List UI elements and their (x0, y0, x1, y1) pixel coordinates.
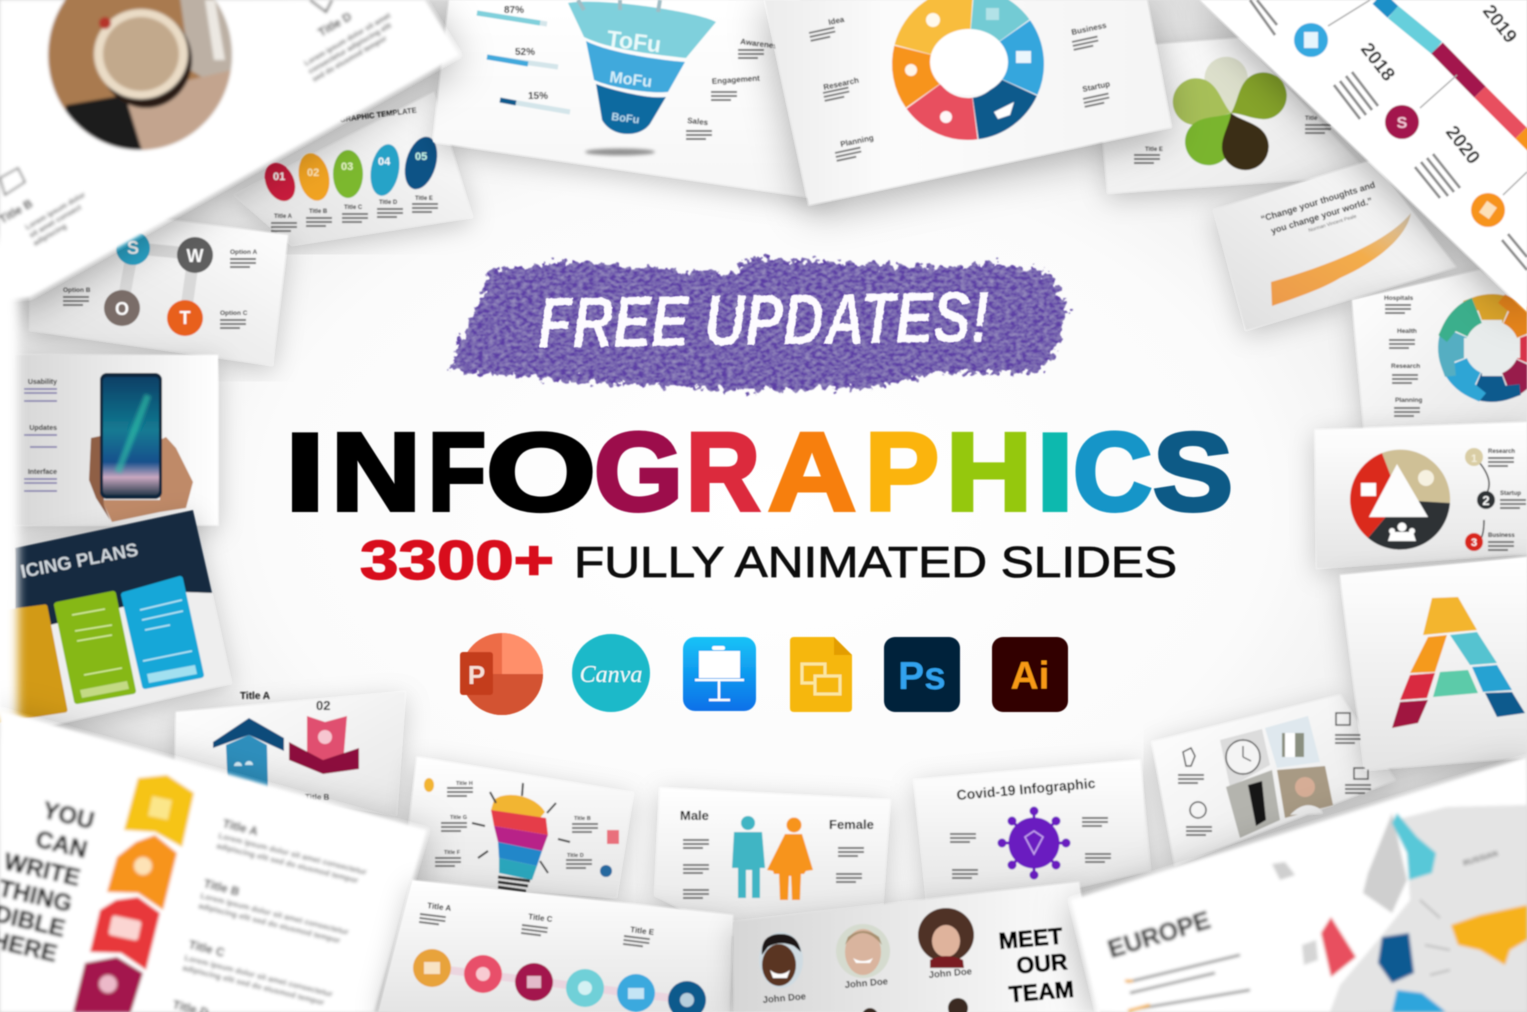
slide count: 3300+ (360, 529, 554, 591)
card: Title B: Lorem ipsum dolor (24, 190, 87, 232)
timeline nodes: S (1397, 115, 1408, 132)
female label: Female (829, 817, 874, 832)
slide: SWOT (30, 215, 288, 365)
Europe text lines (1128, 955, 1250, 1010)
SWOT labels: Option A (230, 249, 258, 256)
slide labels: Title A (240, 691, 270, 702)
brush stroke (1271, 213, 1411, 306)
icon: Illustrator (992, 637, 1068, 712)
slide labels: Title B (305, 793, 330, 802)
icon: Photoshop (884, 637, 960, 712)
title: A (768, 411, 856, 534)
timeline labels (427, 901, 655, 937)
slide: clover (1103, 38, 1370, 193)
team names: John Doe (762, 991, 806, 1006)
percentage bars: 87% (504, 5, 524, 16)
clover labels (1145, 116, 1318, 153)
left white edge (0, 240, 18, 720)
title: I (1036, 411, 1074, 534)
step titles: Title E (415, 196, 433, 202)
slide: timeline (1200, 0, 1527, 312)
percentage bars: 52% (515, 47, 535, 58)
pricing card: pro (124, 579, 201, 686)
hospital labels: Health (1397, 328, 1417, 335)
list: Title A: adipiscing elit sed do eiusmod tempor (216, 841, 359, 885)
free updates text: FREE UPDATES! (537, 278, 990, 364)
SWOT labels: Option C (220, 310, 248, 317)
funnel labels: Engagement (712, 74, 760, 86)
wheel labels: Research (823, 76, 860, 92)
title: C (1073, 411, 1152, 534)
coffee photo circle (46, 0, 234, 152)
teardrop steps: 01 (273, 171, 285, 183)
funnel: MoFu (609, 69, 653, 91)
slide labels (240, 691, 330, 802)
timeline years: 2020 (1441, 122, 1484, 168)
slide: covid infographic (914, 760, 1150, 905)
list: Title B: adipiscing elit sed do eiusmod tempor (198, 901, 341, 945)
slide: pricing plans (0, 510, 231, 728)
SWOT circles (104, 231, 213, 336)
funnel: BoFu (611, 111, 640, 126)
team headline (998, 922, 1075, 1008)
bulb labels: Title D (567, 853, 584, 859)
slide labels: 02 (316, 698, 330, 713)
wheel labels: Business (1071, 21, 1108, 37)
photo tile: person portrait (1277, 766, 1333, 818)
teardrop steps: 02 (307, 167, 319, 179)
funnel shadow (585, 148, 655, 156)
timeline years (1356, 1, 1521, 168)
team headline: MEET (998, 923, 1064, 954)
six segment wheel (891, 0, 1045, 141)
timeline labels: Title E (630, 925, 655, 937)
icon: PowerPoint: P (468, 660, 485, 690)
hand holding phone (89, 373, 193, 522)
slide: funnel (433, 0, 830, 200)
photo slide icons (1183, 713, 1368, 818)
slide: letter A (1340, 557, 1527, 770)
polygon letter A (1392, 597, 1525, 728)
title: I (285, 411, 325, 534)
step titles: Title D (379, 200, 398, 206)
feature list (28, 379, 57, 476)
percentage bars: 15% (528, 91, 548, 102)
wheel labels: Idea (828, 15, 846, 27)
slide: arrows (175, 691, 405, 815)
team names: John Doe (844, 976, 888, 991)
slide headline (0, 797, 97, 968)
hospital labels (1384, 295, 1422, 404)
list: Title C (182, 937, 334, 1007)
quote text: “Change your thoughts and (1260, 180, 1376, 224)
slide: triangle cycle (1315, 422, 1527, 568)
step titles: Title B (309, 209, 328, 215)
card: Title D: sed do eiusmod tempor (310, 34, 388, 84)
SWOT circles: O (115, 299, 129, 319)
SWOT circles: S (127, 238, 139, 258)
photo tile: book (1265, 716, 1320, 768)
title: N (331, 411, 421, 534)
percentage bars (477, 5, 570, 112)
icon: Keynote (683, 637, 756, 711)
feature list: Usability (28, 379, 57, 386)
step titles (274, 196, 433, 220)
list: Title C: Lorem ipsum dolor sit amet consectetur (184, 953, 334, 999)
list: Title C: Title C (187, 937, 226, 960)
card: Title B: sit amet consect (28, 202, 83, 240)
app icons (460, 633, 1068, 715)
pricing heading: ICING PLANS (19, 539, 140, 582)
teardrop steps: 04 (378, 156, 391, 168)
hospital wheel (1439, 295, 1527, 401)
numbered steps: 2 (1482, 493, 1490, 508)
list: Title B (198, 876, 350, 945)
icon: Photoshop: Ps (898, 655, 946, 698)
list: Title A (216, 816, 368, 885)
slide: photo grid (1152, 695, 1395, 865)
slide: Europe map (1071, 757, 1527, 1012)
teardrop steps: 05 (415, 151, 427, 163)
slide: quote (1214, 160, 1456, 330)
title: G (594, 411, 683, 534)
title: F (428, 411, 486, 534)
list: Title C: adipiscing elit sed do eiusmod tempor (182, 963, 325, 1007)
icon: Canva (572, 634, 650, 712)
SWOT labels: Option B (63, 287, 91, 294)
quote text: you change your world.” (1270, 195, 1373, 236)
step labels (1488, 449, 1521, 539)
step labels: Business (1488, 533, 1515, 539)
down arrow (289, 716, 359, 774)
title (285, 411, 1233, 534)
wheel labels: Startup (1082, 79, 1111, 94)
purple brush stroke (451, 258, 1066, 390)
funnel labels: Awareness (740, 37, 783, 51)
slide: phone in hand (15, 355, 218, 525)
slide headline: YOU (40, 797, 97, 835)
timeline text lines (1250, 0, 1527, 270)
card: Title D: Title D (316, 9, 354, 40)
slide: circle timeline (378, 880, 733, 1012)
card: Title D: consectetur adipiscing elit (306, 20, 393, 76)
subtitle text: FULLY ANIMATED SLIDES (574, 538, 1177, 587)
icon: Illustrator: Ai (1010, 655, 1050, 698)
slide: wheel (765, 0, 1171, 205)
bulb labels: Title F (444, 850, 461, 856)
list: Title B: Lorem ipsum dolor sit amet consectetur (200, 891, 350, 937)
title: P (865, 411, 939, 534)
numbered steps: 3 (1471, 537, 1477, 549)
covid heading: Covid-19 Infographic (956, 775, 1096, 803)
hospital labels: Research (1391, 363, 1420, 370)
slide: numbered list (0, 710, 427, 1012)
title: R (686, 411, 760, 534)
photo tile: clock (1220, 729, 1270, 787)
virus icon (999, 808, 1069, 878)
slide: meet our team (733, 882, 1100, 1012)
team portraits (759, 908, 974, 988)
bulb labels: Title H (456, 781, 473, 787)
quote attribution: Norman Vincent Peale (1308, 214, 1358, 234)
slide heading: GRAPHIC TEMPLATE (339, 106, 417, 124)
female figure (767, 818, 813, 900)
team headline: TEAM (1008, 976, 1075, 1007)
wheel hole (930, 29, 1008, 95)
timeline bar (1378, 0, 1527, 152)
SWOT labels (63, 249, 258, 317)
card: Title B (0, 168, 87, 248)
SWOT circles: W (186, 246, 204, 266)
hexagon arrows (73, 775, 194, 1012)
card: Title D (302, 0, 393, 84)
timeline labels: Title C (528, 912, 553, 924)
funnel labels: Sales (687, 116, 709, 127)
title: S (1153, 411, 1233, 534)
hospital labels: Planning (1395, 397, 1422, 404)
timeline years: 2018 (1356, 39, 1399, 85)
lower portraits (862, 998, 968, 1012)
bulb labels: Title G (450, 815, 467, 821)
wheel labels: Planning (840, 133, 875, 149)
wheel labels (823, 15, 1111, 149)
bulb labels (444, 781, 591, 859)
slide headline: CAN (33, 826, 90, 864)
team names (762, 966, 972, 1006)
male label: Male (680, 808, 709, 823)
clover labels: Title E (1145, 147, 1163, 153)
up arrow (213, 718, 284, 790)
list: Title B: Title B (202, 876, 241, 899)
timeline labels: Title A (427, 901, 452, 913)
slide: five step teardrop template (235, 92, 472, 245)
pricing card: basic (0, 607, 65, 720)
slide: coffee photo (0, 0, 459, 300)
wheel icons (905, 8, 1031, 123)
brush banner (451, 258, 1066, 390)
clover labels: Title (1305, 116, 1318, 122)
map label: RUSSIAN (1462, 849, 1499, 868)
feature list: Updates (29, 425, 57, 432)
card: Title B: adipiscing (32, 221, 68, 248)
list: Title A: Title A (221, 816, 260, 839)
Europe heading: EUROPE (1105, 906, 1214, 964)
slide headline: WRITE (1, 848, 83, 892)
timeline nodes (1294, 0, 1527, 227)
title: H (946, 411, 1032, 534)
timeline years: 2019 (1478, 1, 1521, 47)
male figure (732, 816, 765, 898)
funnel labels (687, 37, 783, 127)
step labels: Research (1488, 449, 1515, 455)
teardrop steps (259, 133, 443, 206)
team headline: OUR (1015, 948, 1069, 979)
slide: light bulb (403, 757, 633, 897)
icon: Google Slides (790, 637, 852, 712)
timeline circles (413, 949, 706, 1012)
card: Title D: Lorem ipsum dolor sit amet (302, 11, 393, 68)
bulb graphic (472, 783, 570, 891)
title: O (486, 411, 596, 534)
photo tile: person dark (1226, 770, 1280, 838)
team names: John Doe (928, 966, 972, 981)
funnel: ToFu (605, 25, 663, 58)
clover petals (1167, 54, 1295, 177)
step labels: Startup (1500, 491, 1521, 497)
funnel (568, 0, 716, 134)
feature list: Interface (28, 469, 57, 476)
bulb labels: Title B (574, 816, 591, 822)
subtitle (360, 529, 1177, 591)
list: Title A: Lorem ipsum dolor sit amet consectetur (218, 831, 368, 877)
slide: male and female (655, 788, 890, 935)
SWOT circles: T (180, 308, 190, 328)
teardrop steps: 03 (341, 161, 353, 173)
map of Europe (1272, 805, 1527, 1012)
slide: hospital wheel (1352, 270, 1527, 437)
step titles: Title C (344, 205, 363, 211)
triangle cycle chart (1350, 450, 1450, 550)
numbered steps: 1 (1471, 453, 1477, 465)
pricing card: advanced (57, 594, 133, 701)
hospital labels: Hospitals (1384, 295, 1414, 302)
icon: Canva: Canva (580, 662, 642, 688)
numbered steps (1465, 448, 1495, 551)
icon: PowerPoint (460, 633, 543, 715)
step titles: Title A (274, 214, 293, 220)
